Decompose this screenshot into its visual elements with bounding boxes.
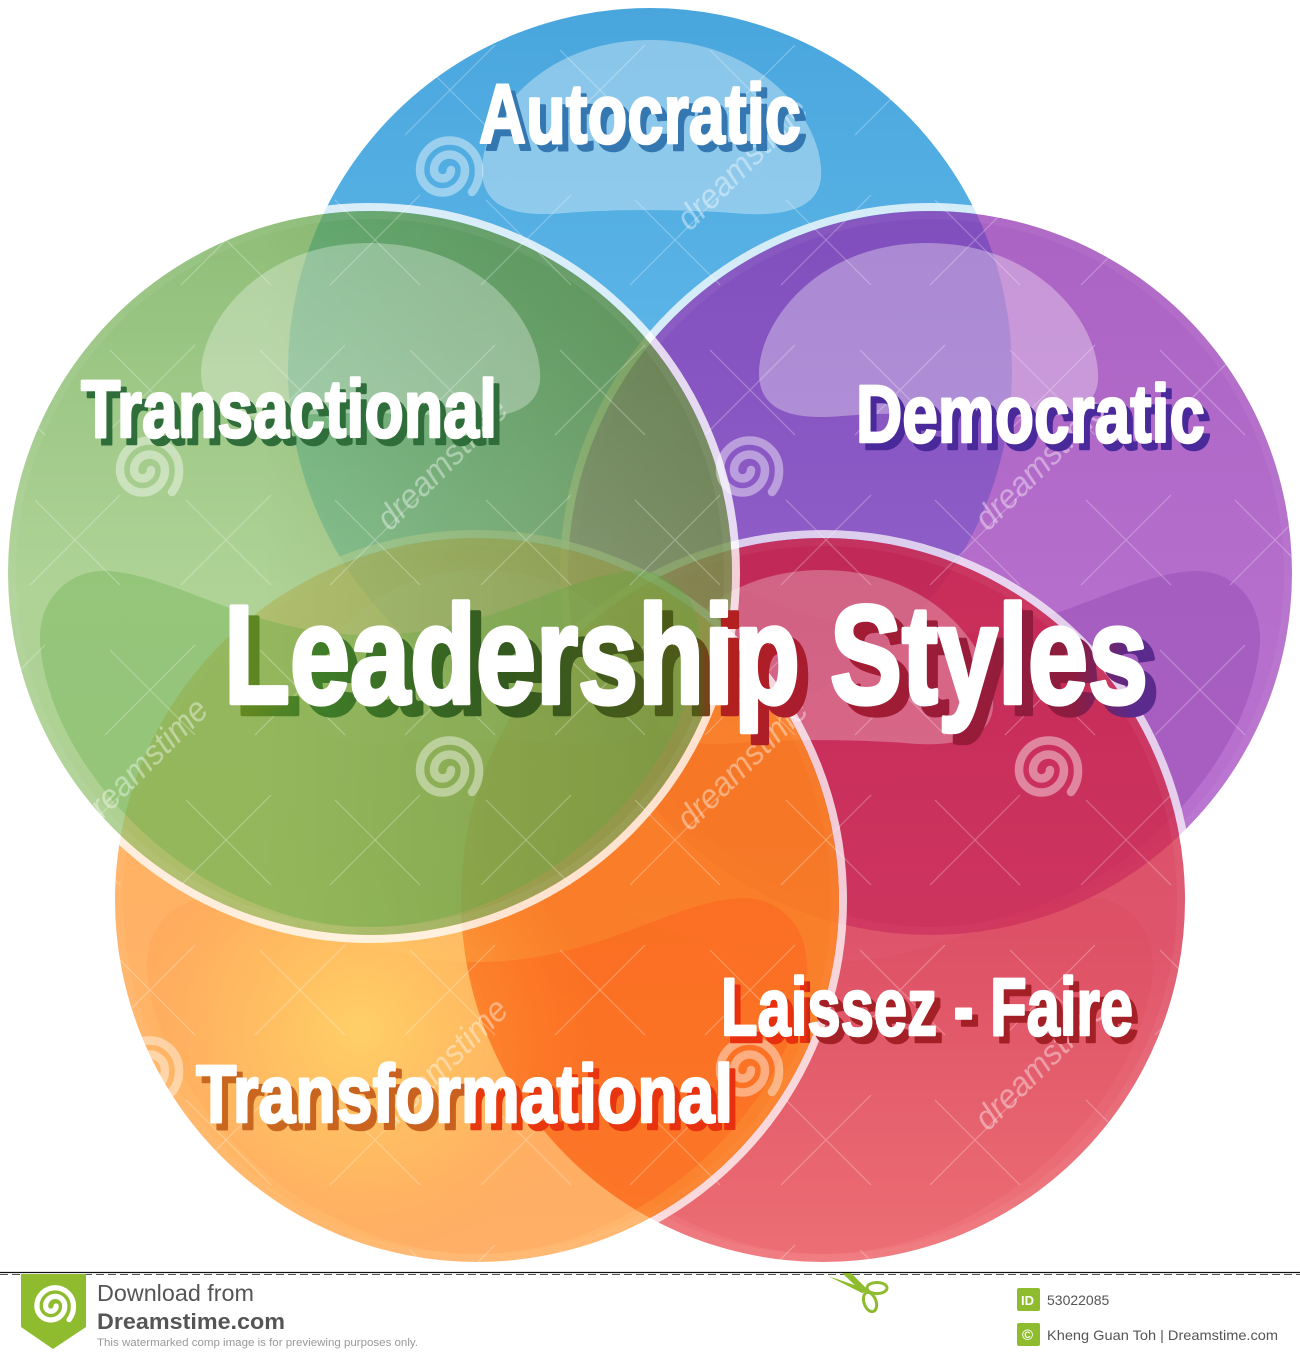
circle: democratic (purple): [564, 207, 1296, 939]
label: Autocratic: Autocratic: [479, 67, 801, 161]
watermark overlay: dreamstime: [967, 991, 1114, 1138]
watermark overlay: dreamstime: [69, 91, 216, 238]
label: Laissez - Faire: Laissez - Faire: [727, 969, 1139, 1060]
id badge: 53022085: [1047, 1292, 1110, 1308]
label: Democratic: Democratic: [862, 376, 1211, 467]
circle: transactional (green): [4, 207, 736, 939]
watermark overlay: dreamstime: [369, 391, 516, 538]
icon: dreamstime badge: [21, 1274, 86, 1349]
label: Transformational: Transformational: [196, 1049, 733, 1140]
watermark overlay: dreamstime: [369, 991, 516, 1138]
copyright badge: Kheng Guan Toh | Dreamstime.com: [1047, 1327, 1278, 1343]
label: Transformational: Transformational: [202, 1056, 739, 1147]
label: Transactional: Transactional: [87, 371, 503, 462]
icon: scissors: [828, 1273, 887, 1313]
label: Transactional: Transactional: [81, 364, 497, 455]
text: download from dreamstime: Download from: [97, 1280, 254, 1306]
id badge: ID: [1021, 1293, 1034, 1308]
watermark overlay: dreamstime: [967, 391, 1114, 538]
footer: cut line: [0, 1272, 1300, 1274]
label: Laissez - Faire: Laissez - Faire: [721, 962, 1133, 1053]
text: download from dreamstime: Dreamstime.com: [97, 1309, 285, 1334]
id badge: [1017, 1288, 1110, 1311]
label: Laissez - Faire: [721, 962, 1139, 1060]
text: download from dreamstime: [97, 1280, 418, 1349]
circle: laissez-faire (red): [457, 534, 1189, 1266]
orange and red overlap tint: [462, 650, 839, 1218]
circle: autocratic (blue): [288, 8, 1012, 732]
label: Democratic: Democratic: [856, 369, 1205, 460]
label: Autocratic: Autocratic: [485, 74, 807, 168]
watermark overlay: dreamstime: [669, 691, 816, 838]
copyright badge: [1017, 1323, 1278, 1346]
watermark overlay: dreamstime: [69, 691, 216, 838]
text: download from dreamstime: This watermarked comp image is for previewing purposes only.: [97, 1337, 418, 1349]
circle: transformational (orange): [111, 534, 843, 1266]
watermark overlay: dreamstime: [669, 91, 816, 238]
copyright badge: ©: [1022, 1327, 1033, 1344]
